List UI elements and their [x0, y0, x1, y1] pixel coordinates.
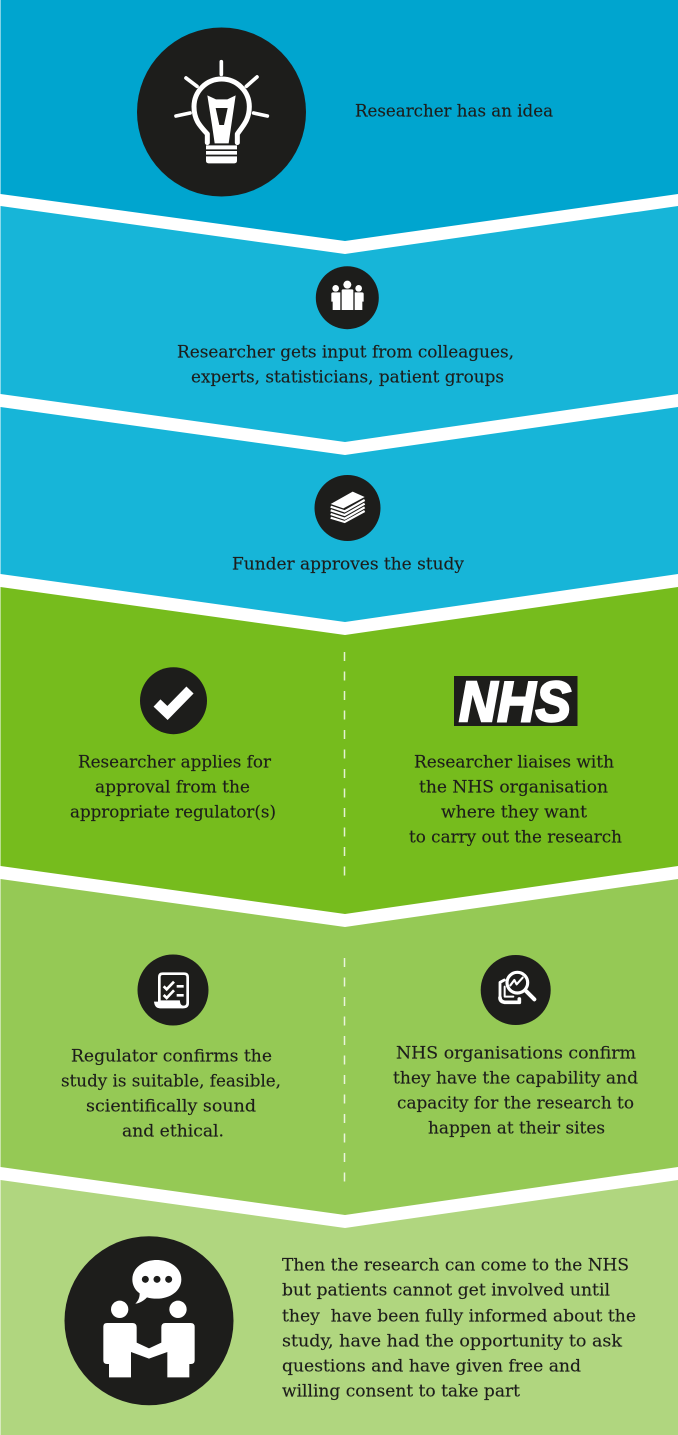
text: research can come to the NHS: willing consent to take part — [282, 1382, 520, 1400]
panel: informed consent — [0, 1180, 678, 1435]
panel: researcher gets input — [0, 206, 678, 442]
panel: applications to regulator and NHS — [0, 587, 678, 914]
text: research can come to the NHS — [282, 1256, 636, 1400]
panel: funder approves — [0, 407, 678, 622]
panel: researcher has an idea — [0, 0, 678, 241]
icon: group of people — [316, 266, 379, 329]
text: researcher liaises with NHS: where they want — [441, 802, 587, 822]
icon: tick — [140, 667, 207, 734]
text: research can come to the NHS: Then the research can come to the NHS — [282, 1256, 629, 1274]
text: researcher gets input from colleagues: Researcher gets input from colleagues, — [177, 342, 514, 362]
text: regulator confirms: Regulator confirms the — [71, 1046, 272, 1066]
icon: checklist document — [138, 954, 208, 1026]
text: researcher gets input from colleagues: experts, statisticians, patient groups — [191, 368, 504, 386]
text: NHS organisations confirm — [393, 1044, 638, 1138]
text: research can come to the NHS: but patients cannot get involved until — [282, 1280, 610, 1300]
panel: regulator and NHS confirmations — [0, 879, 678, 1215]
text: NHS organisations confirm: happen at their sites — [428, 1118, 605, 1138]
text: researcher liaises with NHS: the NHS organisation — [419, 778, 608, 796]
text: researcher liaises with NHS — [409, 752, 622, 846]
text: regulator confirms: and ethical. — [122, 1122, 224, 1140]
icon: stack of papers — [314, 475, 380, 541]
icon: light bulb — [137, 28, 306, 196]
icon: magnifier over document — [481, 955, 551, 1025]
text: researcher applies for approval: approval from the — [95, 778, 250, 796]
text: regulator confirms: study is suitable, feasible, — [61, 1072, 281, 1090]
icon: two people shaking hands with speech bubble — [64, 1236, 234, 1405]
text: regulator confirms: scientifically sound — [86, 1096, 256, 1116]
text: NHS organisations confirm: they have the capability and — [393, 1068, 638, 1088]
text: funder approves the study: Funder approves the study — [232, 554, 465, 574]
text: researcher gets input from colleagues — [177, 342, 514, 386]
text: researcher liaises with NHS: to carry out the research — [409, 828, 622, 846]
text: regulator confirms — [61, 1046, 281, 1140]
text: researcher liaises with NHS: Researcher liaises with — [414, 752, 614, 772]
text: researcher applies for approval — [70, 752, 276, 822]
logo: NHS: NHS — [459, 670, 571, 734]
text: researcher has an idea: Researcher has an idea — [355, 102, 553, 120]
text: research can come to the NHS: study, have had the opportunity to ask — [282, 1332, 623, 1350]
text: research can come to the NHS: they have been fully informed about the — [282, 1306, 636, 1326]
text: researcher applies for approval: appropriate regulator(s) — [70, 802, 276, 822]
text: NHS organisations confirm: capacity for the research to — [397, 1094, 634, 1112]
text: researcher applies for approval: Researcher applies for — [78, 752, 271, 772]
text: NHS organisations confirm: NHS organisations confirm — [396, 1044, 636, 1062]
text: research can come to the NHS: questions and have given free and — [282, 1356, 581, 1376]
